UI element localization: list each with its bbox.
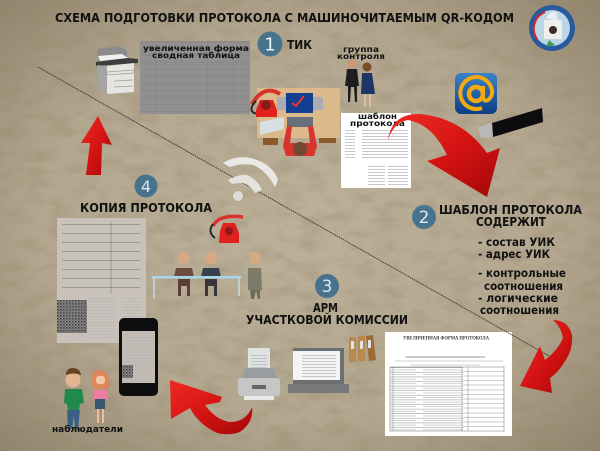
list: template contents: - адрес УИК bbox=[478, 247, 551, 261]
arrow: from template to step 2 bbox=[388, 114, 500, 197]
list: template contents bbox=[478, 235, 566, 317]
list: template contents: - контрольные bbox=[478, 266, 566, 280]
step 2 badge: 2 bbox=[419, 208, 429, 228]
step 3 badge: 3 bbox=[322, 277, 332, 297]
icon: observers bbox=[64, 368, 109, 429]
document: protocol template bbox=[341, 111, 411, 188]
icon: copier bbox=[96, 46, 138, 94]
table caption: увеличенная форма bbox=[143, 44, 249, 53]
heading: template contents bbox=[439, 202, 582, 229]
step 4 badge bbox=[134, 174, 158, 198]
caption: control group: контроля bbox=[337, 52, 385, 61]
heading: protocol copy: КОПИЯ ПРОТОКОЛА bbox=[80, 201, 213, 215]
icon: USB stick bbox=[478, 108, 543, 138]
arrow: from step 2 to protocol form bbox=[520, 320, 572, 393]
heading: template contents: СОДЕРЖИТ bbox=[476, 214, 546, 229]
document: enlarged protocol form: УВЕЛИЧЕННАЯ ФОРМА ПРОТОКОЛА bbox=[403, 336, 489, 342]
step 1 badge: 1 bbox=[264, 34, 276, 56]
table caption bbox=[143, 44, 249, 60]
caption: observers: наблюдатели bbox=[52, 424, 123, 435]
heading: template contents: ШАБЛОН ПРОТОКОЛА bbox=[439, 202, 582, 217]
icon: printer bbox=[238, 348, 280, 400]
arrow: up to copier bbox=[81, 116, 112, 175]
image: enlarged consolidated table bbox=[140, 41, 250, 114]
step 3 badge bbox=[315, 274, 339, 298]
list: template contents: соотношения bbox=[480, 303, 559, 317]
image: protocol copy with QR bbox=[57, 218, 146, 343]
icon: control group people bbox=[345, 60, 375, 107]
list: template contents: - логические bbox=[478, 291, 558, 305]
logo: election commission emblem bbox=[529, 5, 575, 51]
document: enlarged protocol form bbox=[385, 332, 512, 436]
table caption: сводная таблица bbox=[152, 50, 240, 60]
illustration: TEC desk with operator and phone bbox=[251, 88, 340, 156]
list: template contents: соотношения bbox=[484, 279, 563, 293]
template caption: шаблон bbox=[358, 111, 397, 121]
arrow: from printer to phone bbox=[170, 380, 252, 434]
step 4 badge: 4 bbox=[141, 177, 151, 196]
step 1 badge bbox=[258, 32, 282, 56]
icon: laptop bbox=[288, 348, 349, 393]
template caption: протокола bbox=[350, 119, 405, 128]
template caption bbox=[350, 111, 405, 128]
heading: precinct workstation bbox=[246, 301, 408, 327]
heading: ТИК: ТИК bbox=[287, 37, 313, 52]
icon: mail @ bbox=[455, 73, 497, 114]
list: template contents: - состав УИК bbox=[478, 235, 556, 249]
diagonal dotted divider bbox=[38, 67, 558, 361]
icon: folders bbox=[349, 335, 376, 362]
caption: control group bbox=[337, 45, 385, 61]
QR code bbox=[57, 300, 87, 333]
icon: smartphone bbox=[119, 318, 158, 396]
heading: precinct workstation: АРМ bbox=[313, 301, 338, 315]
icon: red telephone bbox=[210, 216, 243, 243]
caption: control group: группа bbox=[343, 45, 379, 54]
heading: precinct workstation: УЧАСТКОВОЙ КОМИССИИ bbox=[246, 312, 408, 327]
illustration: commission at table bbox=[152, 252, 262, 299]
icon: wifi bbox=[223, 157, 278, 201]
step 2 badge bbox=[412, 205, 436, 229]
title: СХЕМА ПОДГОТОВКИ ПРОТОКОЛА С МАШИНОЧИТАЕМЫМ QR-КОДОМ bbox=[55, 10, 514, 25]
